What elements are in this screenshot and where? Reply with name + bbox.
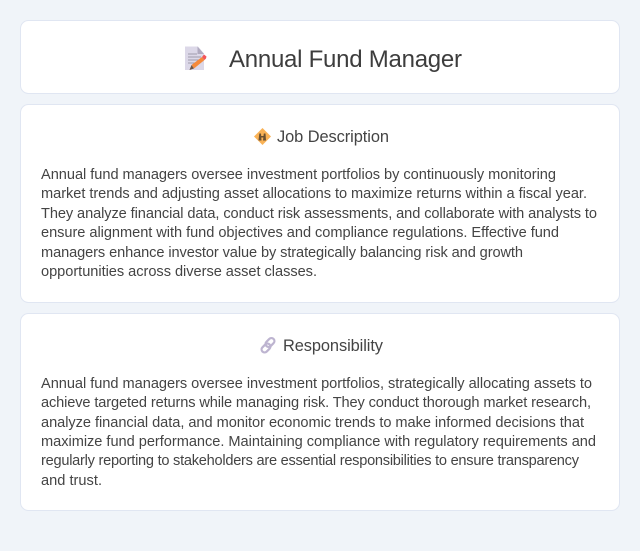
icon: document with pencil <box>185 46 206 70</box>
text block: job description: opportunities across diverse asset classes. <box>41 264 317 280</box>
text block: responsibility: analyze financial data, and monitor economic trends to make informed decisions that <box>41 415 584 431</box>
text block: responsibility <box>41 376 596 489</box>
text block: job description: They analyze financial data, conduct risk assessments, and collaborate with analysts to <box>41 206 597 222</box>
text block: job description <box>41 167 597 280</box>
heading: Annual Fund Manager: Annual Fund Manager <box>229 46 462 73</box>
text block: job description: market trends and adjusting asset allocations to maximize returns within a fiscal year. <box>41 186 587 202</box>
text block: responsibility: achieve targeted returns while managing risk. They conduct thorough market research, <box>41 395 591 411</box>
heading: Job Description: Job Description <box>277 128 389 146</box>
heading: Responsibility: Responsibility <box>283 337 384 355</box>
panel: job description <box>20 104 620 302</box>
panel: title <box>20 20 620 94</box>
panel: responsibility <box>20 314 620 510</box>
text block: responsibility: maximize fund performance. Maintaining compliance with regulatory requirements and <box>41 434 596 450</box>
text block: responsibility: regularly reporting to stakeholders are essential responsibilities to ensure transparency <box>41 453 580 469</box>
text block: job description: managers enhance investor value by strategically balancing risk and growth <box>41 245 523 261</box>
text block: responsibility: and trust. <box>41 473 102 489</box>
icon: chain link <box>260 337 276 354</box>
icon: diamond sign <box>254 128 271 145</box>
text block: job description: Annual fund managers oversee investment portfolios by continuously monitoring <box>41 167 556 183</box>
text block: responsibility: Annual fund managers oversee investment portfolios, strategically allocating assets to <box>41 376 592 392</box>
text block: job description: ensure alignment with fund objectives and compliance regulations. Effective fund <box>41 225 559 241</box>
